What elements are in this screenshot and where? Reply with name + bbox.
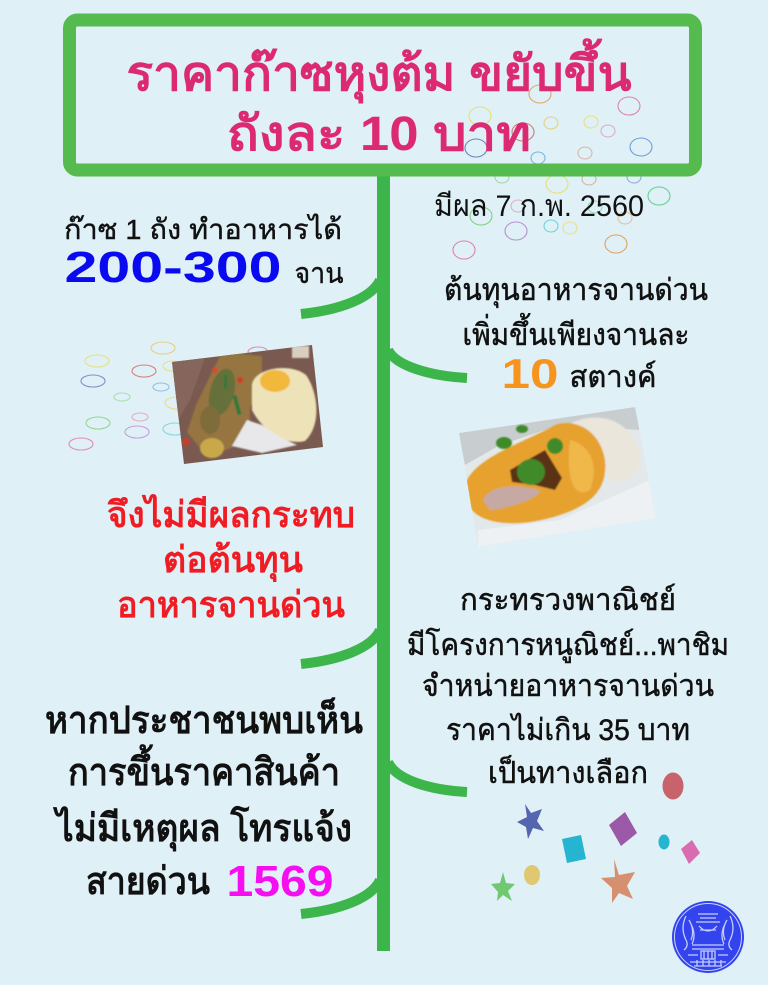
text: report hotline 1569: [45, 697, 363, 906]
text: report hotline 1569: สายด่วน: [86, 861, 210, 903]
icon: government seal: [672, 901, 744, 973]
red heading: no impact on cost: อาหารจานด่วน: [117, 584, 345, 625]
text: commerce ministry project: เป็นทางเลือก: [488, 754, 648, 790]
text: commerce ministry project: [407, 583, 729, 790]
text: cost rises 10 satang: 10: [502, 350, 558, 397]
red heading: no impact on cost: ต่อต้นทุน: [163, 539, 303, 583]
red heading: no impact on cost: จึงไม่มีผลกระทบ: [107, 493, 355, 535]
timeline stem with branches: [301, 170, 467, 951]
text: cost rises 10 satang: เพิ่มขึ้นเพียงจานละ: [462, 313, 690, 352]
text: cost rises 10 satang: ต้นทุนอาหารจานด่วน: [444, 274, 708, 309]
title frame: [70, 20, 696, 170]
text: commerce ministry project: กระทรวงพาณิชย์: [460, 583, 676, 617]
text: commerce ministry project: มีโครงการหนูณิชย์...พาชิม: [407, 627, 729, 663]
photo: omelette on rice: [459, 407, 656, 547]
text: report hotline 1569: 1569: [226, 857, 334, 906]
photo: basil pork with fried egg: [172, 345, 323, 464]
decorative shapes: [491, 772, 700, 903]
red heading: no impact on cost: [107, 493, 355, 625]
text: gas cylinder makes 200-300 plates: ก๊าซ 1 ถัง ทำอาหารได้: [64, 214, 342, 245]
title: [126, 38, 632, 161]
text: commerce ministry project: จำหน่ายอาหารจานด่วน: [422, 670, 714, 703]
title: ถังละ 10 บาท: [227, 108, 531, 161]
decorative bubbles left of photo: [69, 342, 268, 450]
title: ราคาก๊าซหุงต้ม ขยับขึ้น: [126, 38, 632, 104]
text: report hotline 1569: หากประชาชนพบเห็น: [45, 697, 363, 742]
text: commerce ministry project: ราคาไม่เกิน 35 บาท: [446, 712, 690, 747]
decorative bubbles top right: [453, 85, 670, 259]
text: cost rises 10 satang: สตางค์: [570, 360, 656, 394]
text: gas cylinder makes 200-300 plates: [64, 214, 344, 292]
text: report hotline 1569: ไม่มีเหตุผล โทรแจ้ง: [52, 805, 352, 852]
effective date: มีผล 7 ก.พ. 2560: [434, 190, 644, 223]
text: report hotline 1569: การขึ้นราคาสินค้า: [68, 744, 340, 794]
text: gas cylinder makes 200-300 plates: จาน: [294, 258, 344, 290]
text: gas cylinder makes 200-300 plates: 200-300: [64, 243, 282, 292]
text: cost rises 10 satang: [444, 274, 708, 397]
